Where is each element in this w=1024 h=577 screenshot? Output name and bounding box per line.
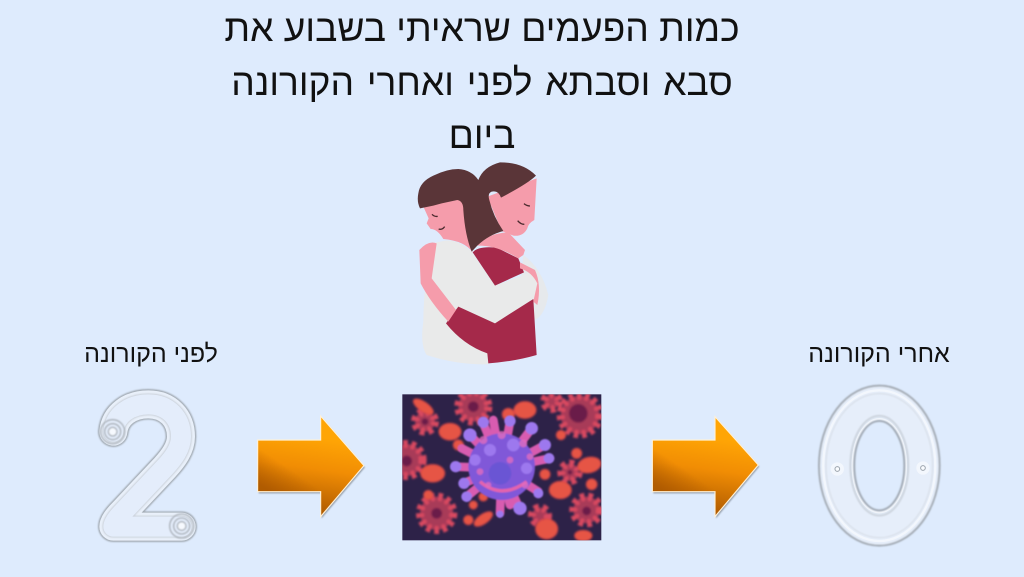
central virus [450, 415, 554, 518]
title: סבא וסבתא לפני ואחרי הקורונה [231, 61, 733, 103]
dark brown hair [418, 162, 536, 252]
title: כמות הפעמים שראיתי בשבוע את [224, 7, 740, 49]
arrow: before to virus [258, 416, 365, 518]
label: before corona: לפני הקורונה [84, 340, 218, 368]
title [224, 7, 740, 156]
facial features [432, 204, 530, 229]
background viruses [391, 392, 602, 541]
pink arms and hands [419, 242, 456, 322]
back person's white side [520, 255, 548, 320]
picture: coronavirus under microscope [391, 392, 602, 541]
front person's neck and face [423, 198, 473, 252]
label: after corona: אחרי הקורונה [808, 340, 950, 368]
digit 2 [101, 404, 194, 538]
illustration: two people hugging [418, 162, 548, 364]
title: ביום [449, 114, 515, 156]
dark red torso [473, 247, 524, 286]
front person's white body [422, 241, 538, 364]
digit 0 [819, 386, 940, 546]
red blood cells [411, 396, 602, 541]
back person's face [487, 178, 537, 236]
arrow: virus to after [652, 417, 759, 518]
